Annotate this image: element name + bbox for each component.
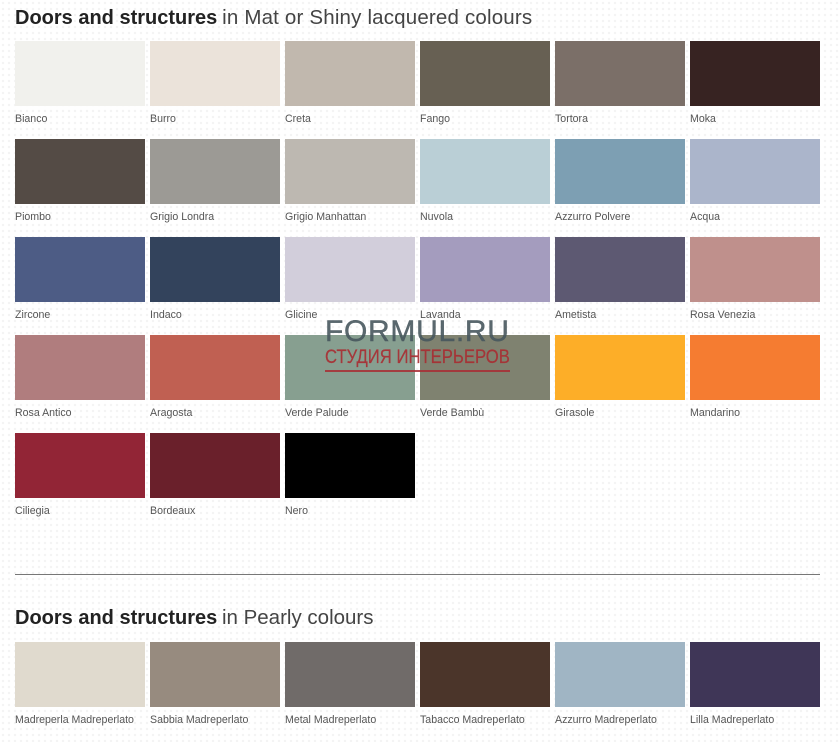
watermark subtitle: СТУДИЯ ИНТЕРЬЕРОВ: [325, 346, 510, 368]
swatch: Ciliegia: [15, 433, 145, 517]
swatch: Azzurro Polvere: Azzurro Polvere: [555, 211, 630, 223]
watermark underline: [325, 370, 510, 372]
swatch: Glicine: Glicine: [285, 309, 317, 321]
swatch: Grigio Londra: [150, 139, 280, 223]
swatch: Fango: [420, 41, 550, 125]
swatch: Azzurro Polvere: [555, 139, 685, 223]
swatch: Bordeaux: [150, 433, 280, 517]
swatch: Madreperla Madreperlato: [15, 642, 145, 726]
swatch: Glicine: [285, 237, 415, 321]
swatch: Verde Bambù: Verde Bambù: [420, 407, 484, 419]
swatch: Grigio Londra: Grigio Londra: [150, 211, 214, 223]
swatch: Indaco: Indaco: [150, 309, 182, 321]
swatch: Tabacco Madreperlato: [420, 642, 550, 726]
swatch: Rosa Venezia: Rosa Venezia: [690, 309, 755, 321]
swatch: Sabbia Madreperlato: [150, 642, 280, 726]
watermark: FORMUL.RU: [325, 315, 510, 372]
swatch: Moka: Moka: [690, 113, 716, 125]
swatch: Acqua: [690, 139, 820, 223]
swatch: Ciliegia: Ciliegia: [15, 505, 50, 517]
swatch: Nuvola: Nuvola: [420, 211, 453, 223]
swatch: Tabacco Madreperlato: Tabacco Madreperlato: [420, 714, 525, 726]
swatch: Zircone: Zircone: [15, 309, 50, 321]
swatch: Ametista: [555, 237, 685, 321]
swatch: Lilla Madreperlato: [690, 642, 820, 726]
swatch: Aragosta: Aragosta: [150, 407, 192, 419]
swatch: Bianco: [15, 41, 145, 125]
swatch: Burro: [150, 41, 280, 125]
swatch: Moka: [690, 41, 820, 125]
panel: lacquered colour swatches: [15, 41, 820, 517]
swatch: Piombo: [15, 139, 145, 223]
swatch: Nero: [285, 433, 415, 517]
heading: lacquered colours: Doors and structures in Mat or Shiny lacquered colours: [15, 6, 532, 29]
swatch: Zircone: [15, 237, 145, 321]
swatch: Metal Madreperlato: Metal Madreperlato: [285, 714, 376, 726]
swatch: Fango: Fango: [420, 113, 450, 125]
swatch: Lavanda: [420, 237, 550, 321]
swatch: Azzurro Madreperlato: [555, 642, 685, 726]
swatch: Lavanda: Lavanda: [420, 309, 461, 321]
swatch: Bordeaux: Bordeaux: [150, 505, 195, 517]
swatch: Nero: Nero: [285, 505, 308, 517]
swatch: Grigio Manhattan: [285, 139, 415, 223]
panel: pearly colour swatches: [15, 642, 820, 726]
swatch: Rosa Venezia: [690, 237, 820, 321]
swatch: Sabbia Madreperlato: Sabbia Madreperlato: [150, 714, 248, 726]
swatch: Indaco: [150, 237, 280, 321]
swatch: Tortora: Tortora: [555, 113, 588, 125]
swatch: Rosa Antico: Rosa Antico: [15, 407, 72, 419]
swatch: Grigio Manhattan: Grigio Manhattan: [285, 211, 366, 223]
swatch: Burro: Burro: [150, 113, 176, 125]
swatch: Creta: [285, 41, 415, 125]
watermark title: FORMUL.RU: [325, 315, 510, 348]
swatch: Lilla Madreperlato: Lilla Madreperlato: [690, 714, 774, 726]
swatch: Ametista: Ametista: [555, 309, 596, 321]
swatch: Tortora: [555, 41, 685, 125]
swatch: Nuvola: [420, 139, 550, 223]
swatch: Creta: Creta: [285, 113, 311, 125]
swatch: Rosa Antico: [15, 335, 145, 419]
swatch: Acqua: Acqua: [690, 211, 720, 223]
swatch: Mandarino: Mandarino: [690, 407, 740, 419]
swatch: Bianco: Bianco: [15, 113, 47, 125]
swatch: Girasole: Girasole: [555, 407, 594, 419]
swatch: Verde Bambù: [420, 335, 550, 419]
swatch: Metal Madreperlato: [285, 642, 415, 726]
swatch: Verde Palude: Verde Palude: [285, 407, 349, 419]
swatch: Mandarino: [690, 335, 820, 419]
swatch: Girasole: [555, 335, 685, 419]
swatch: Madreperla Madreperlato: Madreperla Madreperlato: [15, 714, 134, 726]
swatch: Piombo: Piombo: [15, 211, 51, 223]
swatch: Verde Palude: [285, 335, 415, 419]
heading: pearly colours: Doors and structures in Pearly colours: [15, 606, 374, 629]
swatch: Azzurro Madreperlato: Azzurro Madreperlato: [555, 714, 657, 726]
swatch: Aragosta: [150, 335, 280, 419]
